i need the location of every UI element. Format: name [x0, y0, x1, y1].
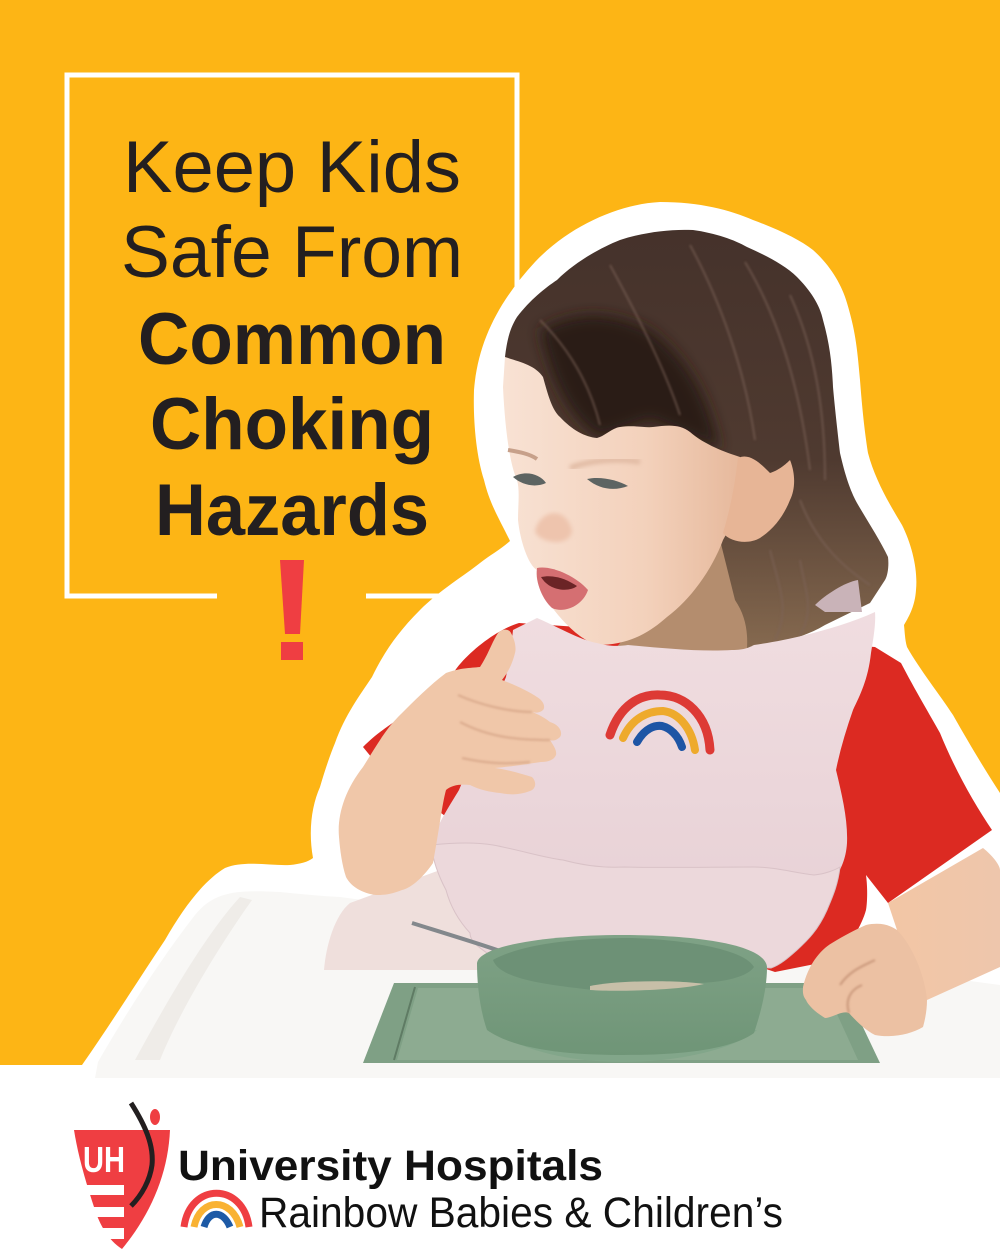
photo: high chair tray	[95, 870, 1000, 1078]
title: Choking	[150, 384, 434, 465]
logo: University Hospitals: University Hospitals	[178, 1142, 603, 1190]
photo: mouth	[537, 567, 588, 610]
title	[121, 127, 463, 551]
photo: ear	[723, 456, 794, 542]
photo: face	[503, 357, 742, 645]
logo: rainbow	[184, 1193, 249, 1227]
photo: right hand	[803, 924, 927, 1036]
logo: shield	[74, 1103, 170, 1249]
photo: left hand and arm	[339, 630, 561, 895]
photo: bib pocket	[431, 843, 840, 968]
logo: Rainbow Babies & Children's: Rainbow Babies & Children’s	[259, 1189, 783, 1237]
title: Hazards	[155, 470, 429, 551]
photo: nose	[535, 513, 572, 542]
title: Common	[138, 299, 446, 380]
photo: green bowl	[477, 935, 767, 1062]
photo: neck	[610, 530, 770, 655]
exclamation mark	[280, 560, 304, 660]
title frame	[67, 75, 517, 596]
title: Keep Kids	[123, 127, 461, 208]
photo: spoon	[412, 923, 591, 990]
photo: white cut-out outline	[82, 202, 1000, 1065]
photo: bib rainbow	[610, 695, 710, 750]
photo: right arm	[880, 848, 1000, 1000]
photo: eyes and brows	[508, 450, 640, 489]
photo: bib	[431, 612, 875, 968]
photo: hair	[505, 230, 888, 648]
logo: shield: UH	[83, 1139, 125, 1180]
photo: bib strap	[815, 580, 862, 612]
photo: red t-shirt	[363, 623, 992, 972]
title: Safe From	[121, 212, 463, 293]
